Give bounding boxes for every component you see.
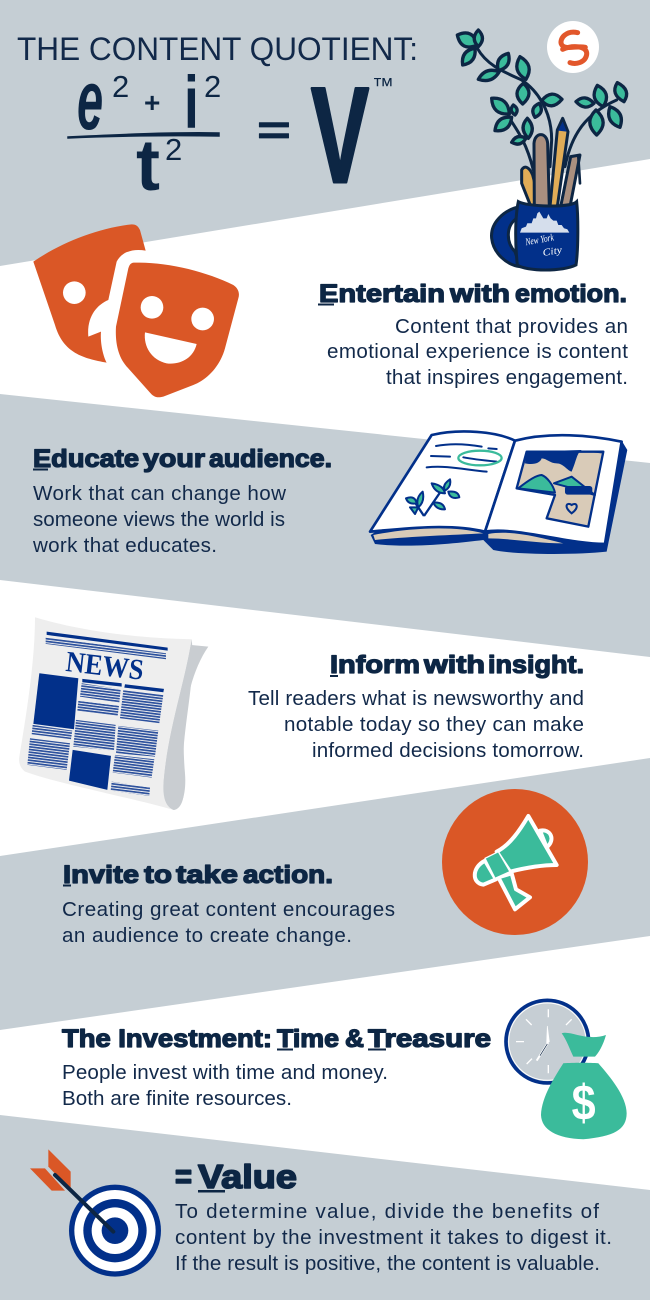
section: investment: Time bbox=[277, 1025, 339, 1053]
icon: target with arrow bbox=[30, 1149, 161, 1277]
section: invite: Creating great content encourages bbox=[62, 898, 395, 921]
icon: megaphone bbox=[442, 789, 588, 935]
section: educate: work that educates. bbox=[32, 534, 217, 557]
section: inform: notable today so they can make bbox=[284, 713, 584, 736]
section: value: Value bbox=[198, 1158, 297, 1195]
section: investment: & bbox=[345, 1025, 364, 1053]
formula: = bbox=[257, 108, 291, 153]
icon: clock and money bag: $ bbox=[572, 1075, 596, 1131]
icon: plant and pens in mug bbox=[457, 30, 627, 270]
title: THE CONTENT QUOTIENT: bbox=[17, 31, 418, 67]
background band: header bbox=[0, 0, 650, 266]
section: educate bbox=[32, 445, 332, 557]
logo bbox=[547, 21, 599, 73]
section: invite bbox=[62, 861, 395, 947]
section: educate: audience. bbox=[209, 445, 332, 473]
icon: open book bbox=[370, 431, 627, 554]
section: invite: an audience to create change. bbox=[62, 924, 352, 947]
background band: invite bbox=[0, 758, 650, 1030]
section: value: To determine value, divide the benefits of bbox=[175, 1200, 599, 1223]
formula: + bbox=[144, 87, 160, 118]
section: inform: Tell readers what is newsworthy and bbox=[248, 687, 584, 710]
icon: clock and money bag bbox=[506, 1000, 627, 1139]
section: inform: with bbox=[423, 651, 485, 679]
section: investment: People invest with time and money. bbox=[62, 1061, 388, 1084]
section: investment: The Investment: bbox=[62, 1025, 272, 1053]
formula bbox=[68, 54, 394, 212]
section: invite: to bbox=[144, 861, 172, 889]
background band: value bbox=[0, 1115, 650, 1300]
formula: e bbox=[77, 54, 103, 148]
section: entertain: with bbox=[449, 280, 510, 308]
section: entertain: emotion. bbox=[515, 280, 627, 308]
section: inform bbox=[248, 651, 584, 762]
formula: 2 bbox=[112, 69, 129, 104]
section: entertain: Content that provides an bbox=[395, 315, 628, 338]
formula: ™ bbox=[372, 73, 394, 98]
icon: newspaper bbox=[19, 617, 208, 810]
section: invite: Invite bbox=[63, 861, 139, 889]
section: investment: Treasure bbox=[368, 1025, 491, 1053]
formula: 2 bbox=[165, 132, 182, 167]
section: entertain: Entertain bbox=[319, 280, 445, 308]
section: educate: someone views the world is bbox=[33, 508, 285, 531]
icon: newspaper: NEWS bbox=[64, 646, 145, 687]
icon: plant and pens in mug: City bbox=[542, 245, 564, 259]
section: invite: action. bbox=[243, 861, 333, 889]
formula: V bbox=[311, 61, 369, 212]
section: educate: your bbox=[143, 445, 205, 473]
icon: theatre masks bbox=[33, 224, 239, 397]
section: entertain: emotional experience is content bbox=[327, 340, 628, 363]
section: value: content by the investment it takes to digest it. bbox=[175, 1226, 612, 1249]
section: value bbox=[175, 1158, 612, 1275]
formula: i bbox=[184, 61, 199, 144]
formula: 2 bbox=[204, 69, 221, 104]
section: entertain bbox=[318, 280, 628, 389]
section: invite: take bbox=[176, 861, 238, 889]
section: educate: Work that can change how bbox=[33, 482, 286, 505]
section: inform: informed decisions tomorrow. bbox=[312, 739, 584, 762]
section: educate: Educate bbox=[33, 445, 139, 473]
icon: plant and pens in mug: New York bbox=[524, 232, 555, 248]
section: value: = bbox=[175, 1158, 192, 1195]
section: investment: Both are finite resources. bbox=[62, 1087, 292, 1110]
section: entertain: that inspires engagement. bbox=[386, 366, 628, 389]
background band: educate bbox=[0, 394, 650, 657]
section: investment bbox=[62, 1025, 491, 1110]
section: value: If the result is positive, the content is valuable. bbox=[175, 1252, 600, 1275]
section: inform: Inform bbox=[330, 651, 420, 679]
formula: t bbox=[136, 126, 160, 206]
section: inform: insight. bbox=[488, 651, 584, 679]
